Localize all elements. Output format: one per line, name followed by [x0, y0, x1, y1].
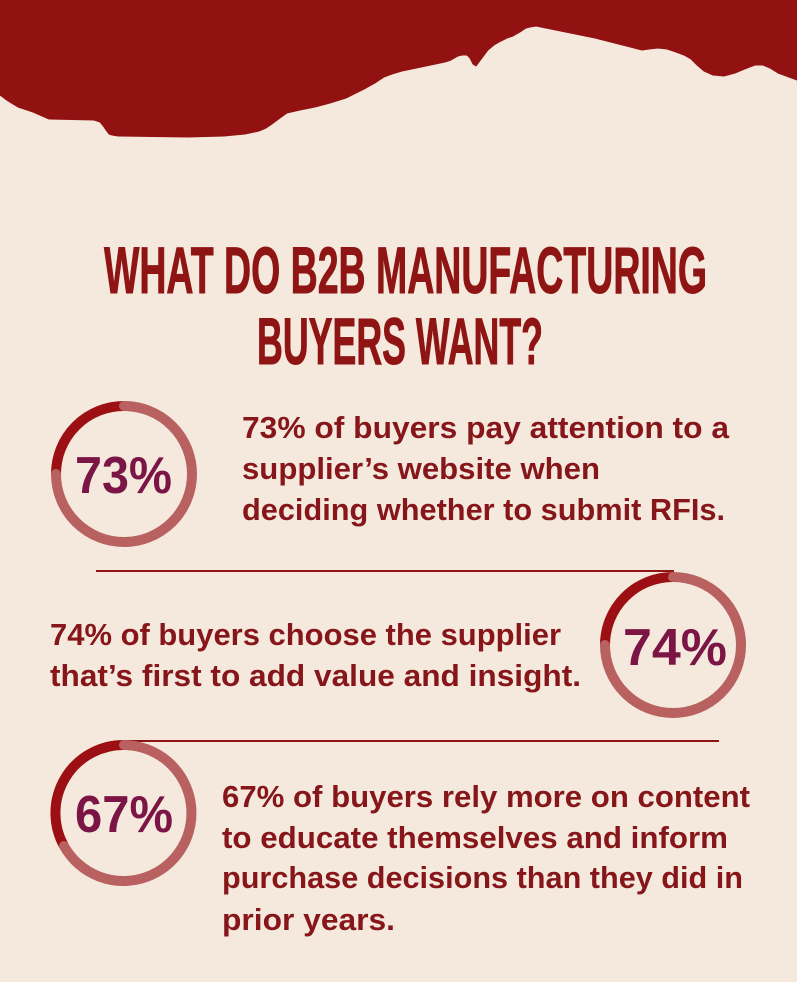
- stat 3 text: to educate themselves and inform: [222, 820, 728, 855]
- stat 1: 73 percent ring: [56, 406, 192, 542]
- stat 3: 67 percent ring: [55, 745, 191, 881]
- divider line 2: [124, 740, 719, 742]
- stat 2 text: [50, 617, 581, 693]
- stat 3 text: purchase decisions than they did in: [222, 860, 743, 895]
- stat 2 text: that’s first to add value and insight.: [50, 658, 581, 693]
- stat 2: 74 percent ring: [605, 577, 741, 713]
- stat 2 text: 74% of buyers choose the supplier: [50, 617, 561, 652]
- divider line 1: [96, 570, 674, 572]
- stat 1 text: deciding whether to submit RFIs.: [242, 492, 725, 527]
- title: BUYERS WANT?: [257, 304, 543, 378]
- stat 3: 67 percent ring: 67%: [75, 786, 173, 844]
- stat 3 text: 67% of buyers rely more on content: [222, 779, 750, 814]
- stat 1: 73 percent ring: 73%: [75, 447, 172, 505]
- stat 2: 74 percent ring: 74%: [623, 619, 727, 677]
- title: [104, 233, 707, 378]
- stat 1 text: [242, 410, 730, 527]
- stat 3 text: [222, 779, 750, 937]
- stat 1 text: 73% of buyers pay attention to a: [242, 410, 730, 445]
- header shape: dark red torn edge: [0, 0, 797, 137]
- stat 3 text: prior years.: [222, 902, 395, 937]
- stat 1 text: supplier’s website when: [242, 451, 600, 486]
